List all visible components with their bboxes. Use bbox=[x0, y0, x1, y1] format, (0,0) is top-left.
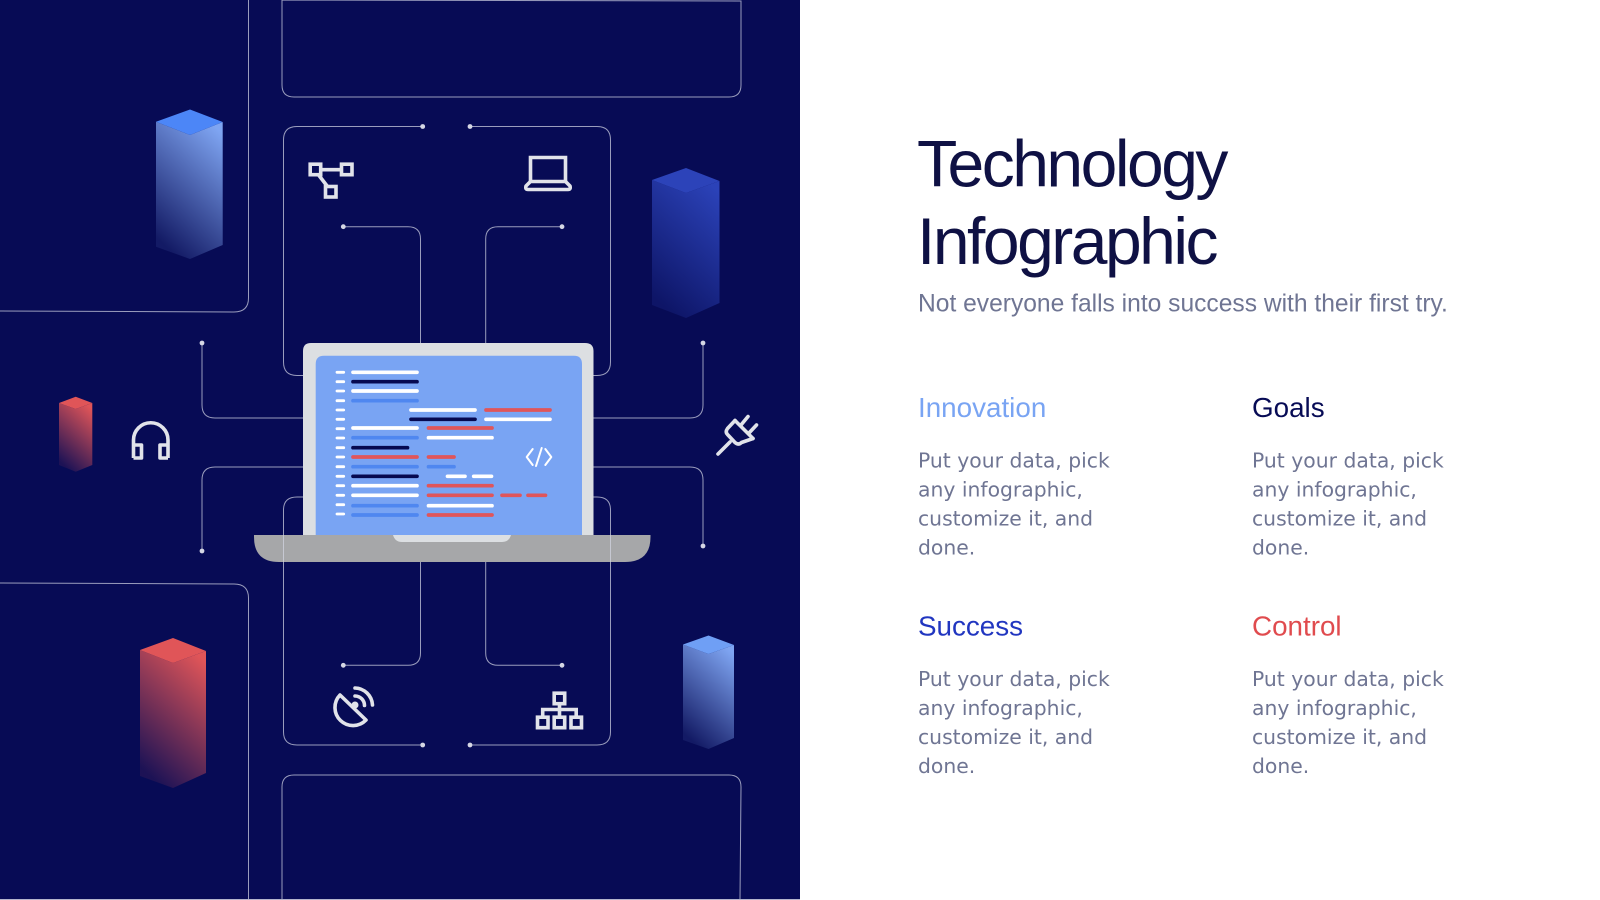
heading: Goals bbox=[1252, 392, 1325, 423]
body: any infographic, bbox=[918, 477, 1083, 501]
bar: light blue bottom right bbox=[683, 636, 734, 749]
body: Put your data, pick bbox=[1252, 667, 1444, 691]
circuit lines bbox=[0, 0, 741, 899]
icon: node graph bbox=[310, 164, 352, 197]
icon: org chart bbox=[538, 693, 582, 728]
body: any infographic, bbox=[918, 696, 1083, 720]
laptop lid bbox=[303, 343, 594, 535]
body: done. bbox=[918, 754, 975, 778]
lines over laptop base bbox=[284, 535, 610, 562]
body: customize it, and bbox=[1252, 725, 1427, 749]
block: Success bbox=[918, 610, 1110, 778]
bar: dark blue top right bbox=[652, 168, 720, 318]
block: Control bbox=[1252, 610, 1444, 778]
body: customize it, and bbox=[918, 506, 1093, 530]
laptop bbox=[254, 343, 650, 562]
body: customize it, and bbox=[1252, 506, 1427, 530]
body: customize it, and bbox=[918, 725, 1093, 749]
subtitle: Not everyone falls into success with their first try. bbox=[918, 290, 1448, 318]
laptop base bbox=[254, 535, 650, 562]
block: Innovation bbox=[918, 392, 1110, 559]
heading: Innovation bbox=[918, 392, 1046, 423]
heading: Success bbox=[918, 610, 1023, 642]
block: Goals bbox=[1252, 392, 1444, 559]
body: Put your data, pick bbox=[918, 667, 1110, 691]
laptop screen bbox=[316, 356, 582, 535]
title: Technology bbox=[917, 126, 1228, 200]
icon: code brackets bbox=[527, 448, 551, 466]
icon: satellite dish bbox=[335, 688, 372, 726]
bar: small red left bbox=[59, 397, 92, 472]
bar: red bottom left bbox=[140, 638, 206, 788]
laptop notch bbox=[393, 535, 511, 542]
body: done. bbox=[918, 535, 975, 559]
body: done. bbox=[1252, 754, 1309, 778]
body: any infographic, bbox=[1252, 477, 1417, 501]
icon: laptop bbox=[526, 158, 570, 190]
icon: plug bbox=[718, 416, 756, 454]
body: Put your data, pick bbox=[1252, 448, 1444, 472]
body: Put your data, pick bbox=[918, 448, 1110, 472]
body: done. bbox=[1252, 535, 1309, 559]
heading: Control bbox=[1252, 610, 1342, 642]
title: Infographic bbox=[917, 204, 1218, 278]
icon: headphones bbox=[134, 423, 168, 458]
code lines bbox=[337, 372, 550, 515]
bar: blue top left bbox=[156, 110, 223, 259]
panel: illustration background bbox=[0, 0, 800, 899]
body: any infographic, bbox=[1252, 696, 1417, 720]
